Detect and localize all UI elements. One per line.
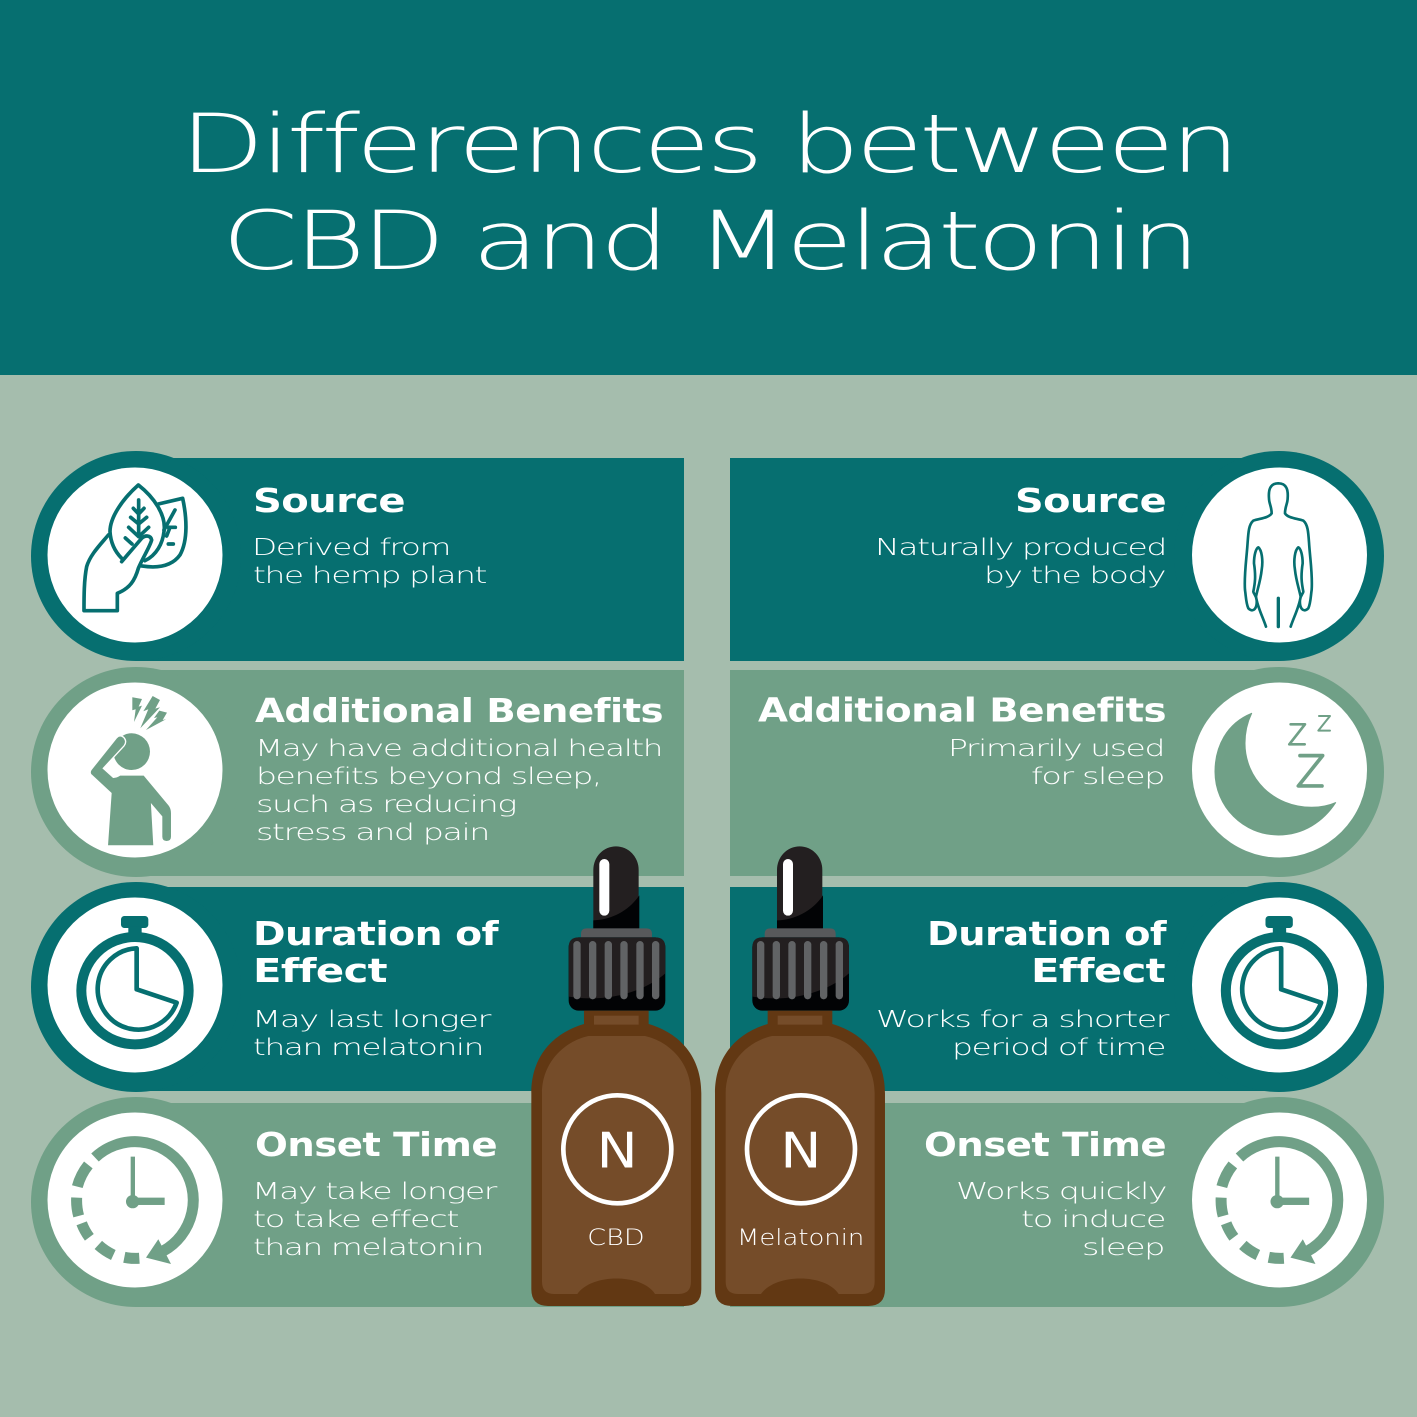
text block: by the body [984,561,1165,589]
bottle: Melatonin [715,846,885,1306]
bottle: CBD: CBD [587,1226,645,1251]
heading: Source [1015,481,1166,520]
icon: stopwatch [1226,916,1333,1044]
icon: clock with arrow [1221,1142,1338,1264]
header banner [0,0,1417,375]
panel: melatonin duration of effect [730,882,1384,1092]
panel: CBD duration of effect [31,882,684,1092]
text block: for sleep [1031,762,1164,790]
text block: Works for a shorter [876,1005,1170,1033]
icon: stopwatch [81,916,189,1044]
text block: to induce [1021,1205,1165,1233]
heading [253,914,499,990]
text block [876,1005,1170,1061]
heading: Source [253,481,405,520]
text block [255,734,662,846]
panel: CBD source [31,451,684,661]
heading: Onset Time [924,1125,1166,1164]
heading: Effect [1031,951,1166,990]
panel: melatonin source [730,451,1384,661]
panel: melatonin additional benefits [730,667,1384,877]
heading: Duration of [927,914,1167,953]
text block: Derived from [252,533,450,561]
text block: such as reducing [256,790,516,818]
text block: sleep [1082,1233,1164,1261]
title: Differences between [180,98,1236,192]
text block: the hemp plant [253,561,487,589]
text block: Works quickly [956,1177,1166,1205]
heading: Additional Benefits [255,691,663,730]
bottle: Melatonin: Melatonin [737,1226,864,1251]
text block: Naturally produced [875,533,1166,561]
icon: human body outline [1245,483,1312,627]
text block: to take effect [253,1205,459,1233]
icon: clock with arrow [77,1142,193,1264]
text block: May take longer [252,1177,498,1205]
text block [956,1177,1166,1261]
text block [252,1177,498,1261]
icon: moon and Z letters [1215,713,1336,835]
icon: person with headache [90,696,172,846]
panel: melatonin onset time [730,1097,1384,1307]
text block: period of time [952,1033,1165,1061]
panel: CBD additional benefits [31,667,684,877]
text block: stress and pain [256,818,489,846]
heading: Duration of [253,914,499,953]
text block: than melatonin [253,1233,483,1261]
title: CBD and Melatonin [222,195,1196,289]
panel: CBD onset time [31,1097,684,1307]
text block [875,533,1166,589]
text block: than melatonin [253,1033,483,1061]
heading [927,914,1167,990]
heading: Additional Benefits [758,690,1166,730]
text block: May last longer [252,1005,492,1033]
text block: benefits beyond sleep, [256,762,601,790]
bottle: CBD: N [597,1123,638,1179]
bottle: Melatonin: N [780,1123,821,1179]
bottle: CBD [531,846,701,1306]
heading: Effect [253,951,388,990]
text block: Primarily used [948,734,1164,762]
heading: Onset Time [255,1125,497,1164]
text block: May have additional health [255,734,662,762]
title [180,98,1236,289]
text block [948,734,1164,790]
text block [252,533,487,589]
icon: hand holding leaves [84,485,186,611]
text block [252,1005,492,1061]
